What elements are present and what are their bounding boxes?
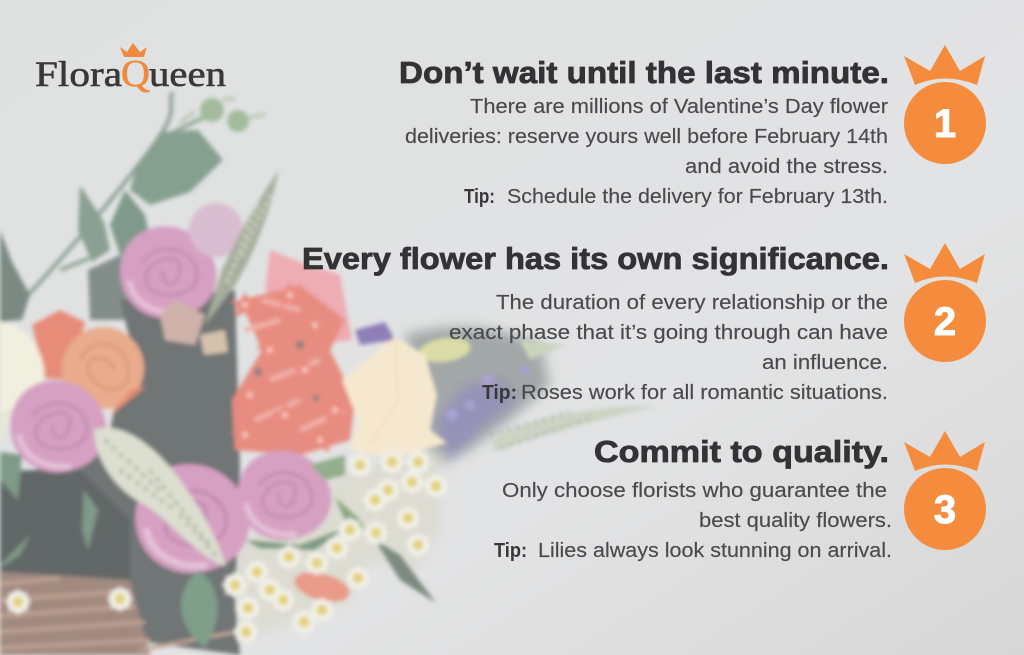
tip 2 text: The duration of every relationship or the	[496, 291, 888, 314]
green bud and leaf	[335, 497, 365, 530]
blurred underlay	[235, 327, 550, 640]
tip 2 text	[302, 241, 889, 404]
tip 2 text: Tip:	[482, 381, 517, 404]
logo: ueen	[149, 54, 226, 94]
pale salmon rose behind coral	[265, 250, 352, 345]
tip 2 text: exact phase that it’s going through can have	[449, 321, 888, 344]
purple sprig	[355, 322, 655, 452]
logo: Flora	[35, 54, 122, 94]
tip 3 text: Tip:	[494, 539, 527, 562]
tip 1 text: Don’t wait until the last minute.	[399, 55, 889, 90]
tip 1 text: and avoid the stress.	[685, 155, 888, 178]
large green leaf	[181, 570, 218, 648]
tip 3 text: Commit to quality.	[594, 434, 889, 469]
tall green spike	[205, 170, 279, 325]
bud cluster	[160, 300, 205, 345]
tip 1 text: deliveries: reserve yours well before February 14th	[405, 125, 888, 148]
logo: Q	[121, 53, 150, 95]
white rose	[0, 322, 44, 412]
tip 3 text: best quality flowers.	[699, 509, 892, 532]
flower bouquet photo	[0, 92, 655, 655]
tip 1 text: There are millions of Valentine’s Day flower	[470, 95, 888, 118]
badge 3: 3	[934, 488, 956, 532]
coral flower cluster	[231, 282, 355, 455]
tip 2 text: an influence.	[762, 351, 888, 374]
dark centre mass	[0, 290, 240, 655]
tip 1 text	[399, 55, 889, 208]
pink rose bottom	[135, 464, 250, 573]
cream rose	[342, 337, 447, 458]
white spike	[94, 428, 226, 566]
pale pink rose back	[189, 203, 243, 257]
badge 2: 2	[934, 300, 956, 344]
stems and foliage top	[0, 92, 266, 322]
badge 1: 1	[934, 102, 956, 146]
logo crown	[120, 43, 147, 57]
logo	[35, 43, 226, 95]
tip 2 text: Roses work for all romantic situations.	[521, 381, 888, 404]
tip 3 text: Only choose florists who guarantee the	[502, 479, 887, 502]
tip 1 text: Tip:	[464, 185, 495, 208]
tip 2 text: Every flower has its own significance.	[302, 241, 889, 276]
green foliage left	[0, 452, 98, 568]
red and orange roses	[32, 310, 146, 416]
badge 3	[904, 431, 986, 550]
badge 2	[904, 243, 986, 362]
badge 1	[904, 45, 986, 164]
daisies	[4, 448, 450, 646]
pink rose left	[10, 381, 107, 472]
pink rose centre	[238, 451, 331, 540]
lower right leaf	[375, 540, 436, 603]
tip 1 text: Schedule the delivery for February 13th.	[507, 185, 888, 208]
wicker basket	[0, 572, 235, 655]
peach petal	[292, 567, 352, 607]
tip 3 text	[494, 434, 892, 562]
tip 3 text: Lilies always look stunning on arrival.	[538, 539, 892, 562]
pink rose top	[120, 227, 217, 318]
